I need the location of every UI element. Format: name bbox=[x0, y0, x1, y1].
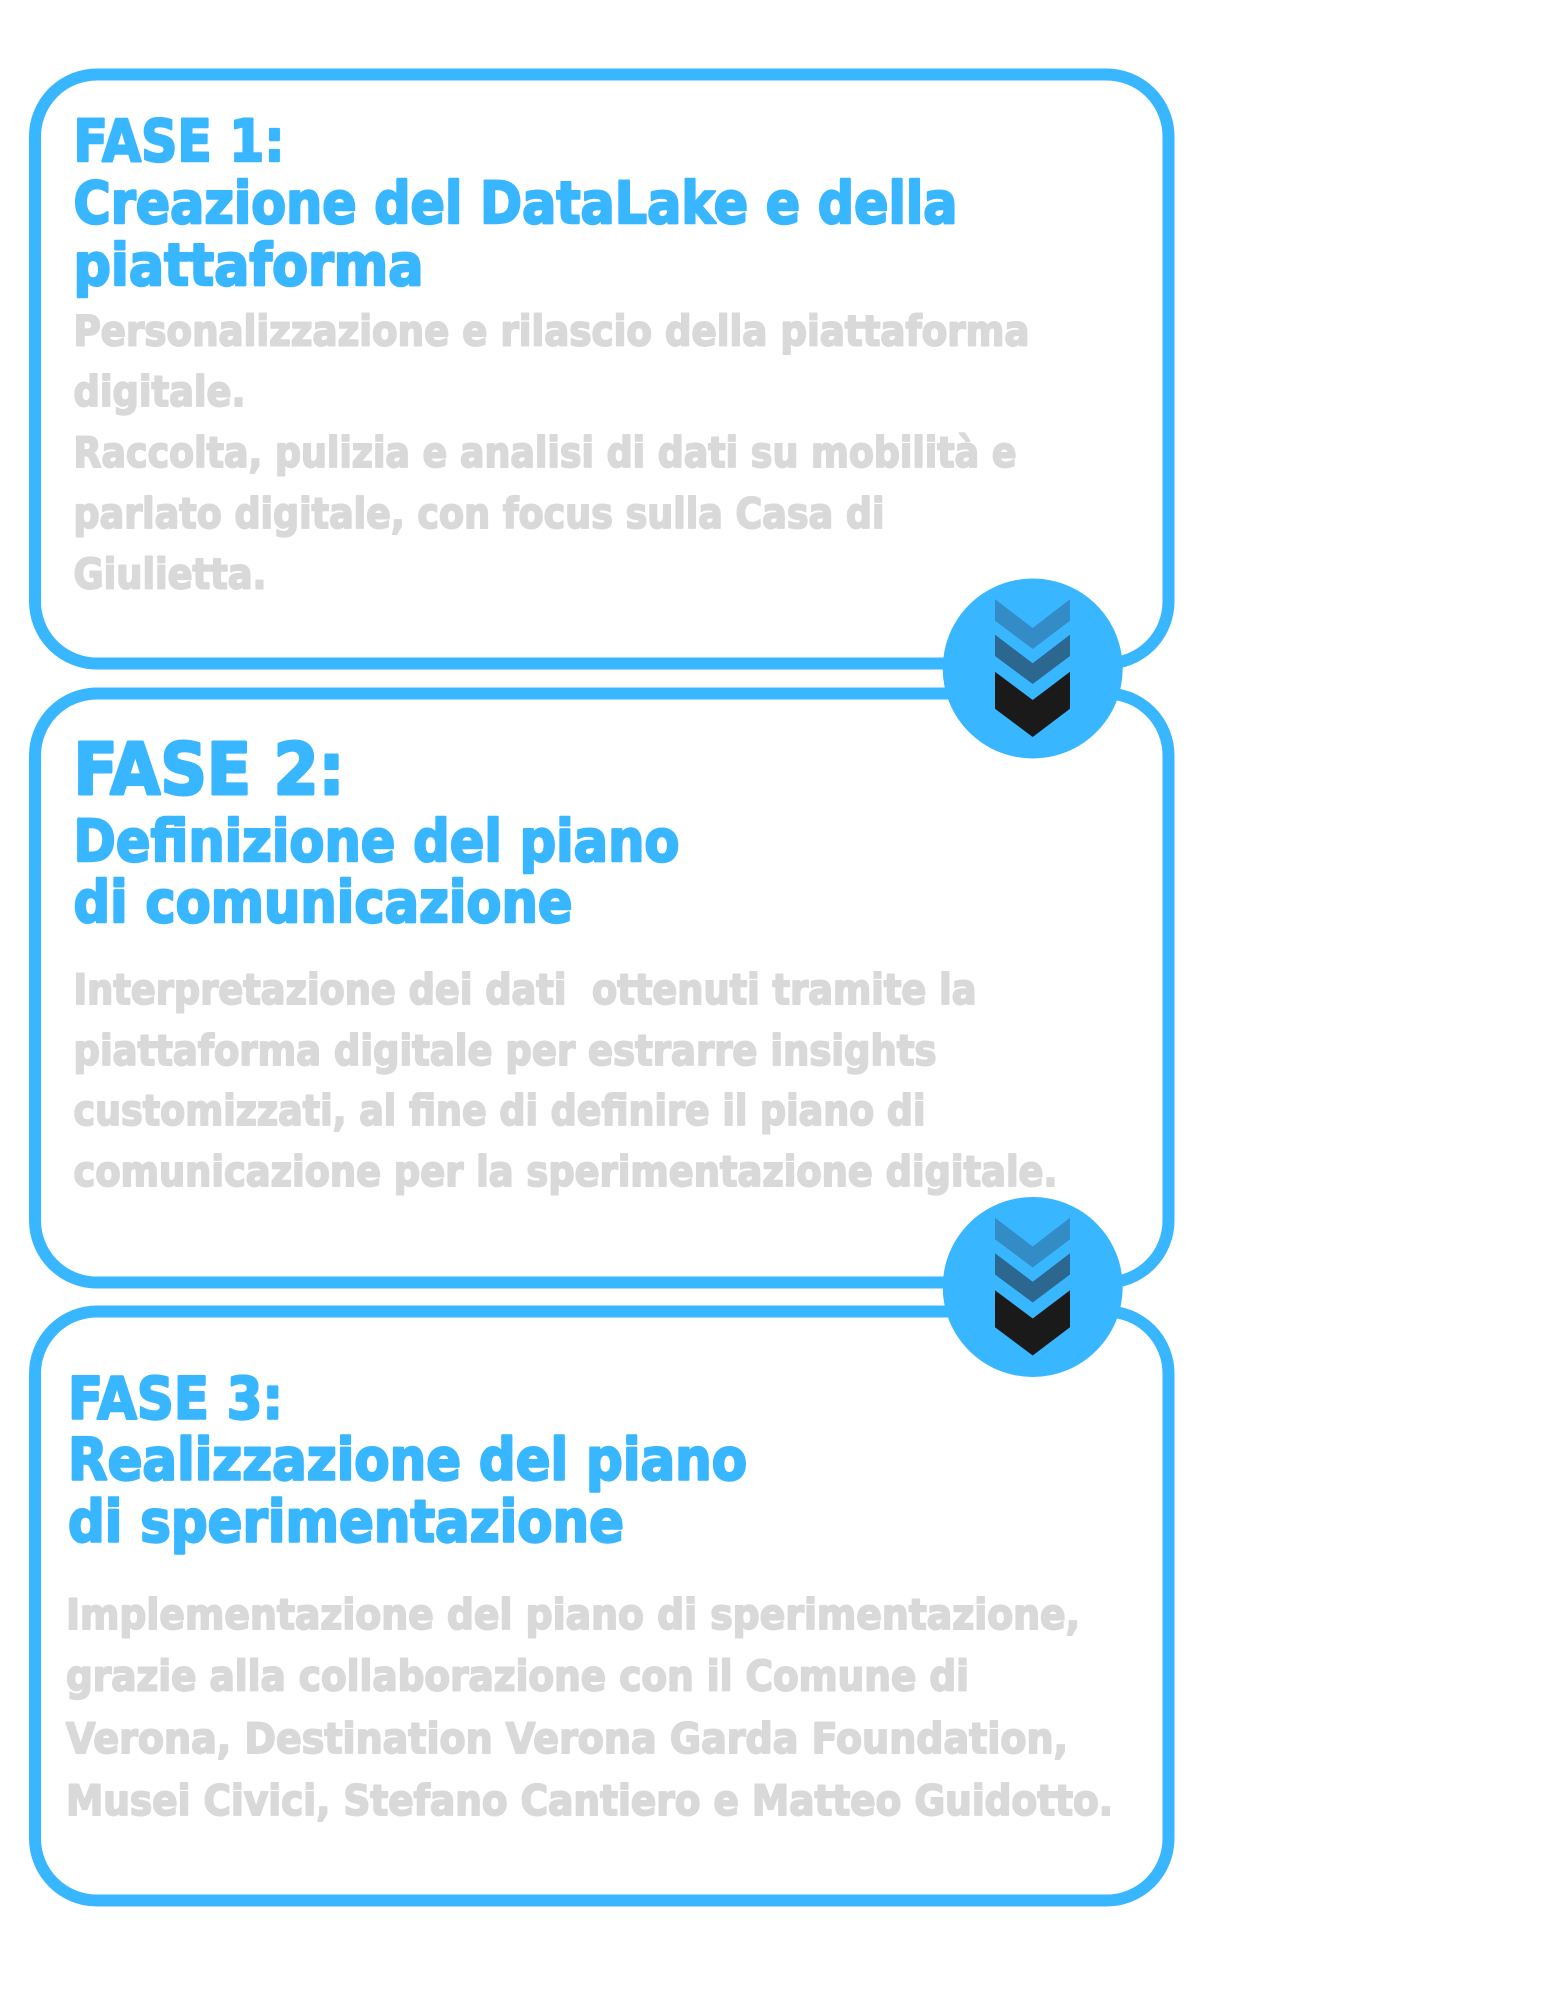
heading: fase 3: FASE 3: bbox=[68, 1366, 283, 1432]
heading: fase 1 bbox=[74, 108, 958, 299]
heading: fase 3: Realizzazione del piano bbox=[68, 1426, 747, 1494]
panel 1 border bbox=[35, 74, 1168, 664]
text block: fase 3 description: Musei Civici, Stefano Cantiero e Matteo Guidotto. bbox=[66, 1776, 1113, 1825]
heading: fase 2: FASE 2: bbox=[74, 728, 344, 811]
text block: fase 3 description: Implementazione del piano di sperimentazione, bbox=[66, 1590, 1080, 1639]
panel: fase 2 bbox=[35, 694, 1168, 1282]
text block: fase 1 description bbox=[74, 306, 1030, 598]
text block: fase 2 description: comunicazione per la sperimentazione digitale. bbox=[74, 1147, 1058, 1196]
icon: chevrons down badge 2 bbox=[943, 1197, 1123, 1377]
text block: fase 1 description: parlato digitale, con focus sulla Casa di bbox=[74, 489, 884, 538]
panel: fase 1 bbox=[35, 74, 1168, 664]
heading: fase 3 bbox=[68, 1366, 747, 1556]
panel 3 border bbox=[35, 1312, 1168, 1900]
heading: fase 1: Creazione del DataLake e della bbox=[74, 170, 958, 237]
text block: fase 1 description: digitale. bbox=[74, 367, 246, 416]
heading: fase 1: piattaforma bbox=[74, 232, 424, 299]
text block: fase 1 description: Raccolta, pulizia e analisi di dati su mobilità e bbox=[74, 428, 1016, 477]
heading: fase 2: di comunicazione bbox=[74, 869, 572, 936]
text block: fase 3 description: Verona, Destination Verona Garda Foundation, bbox=[66, 1714, 1068, 1763]
text block: fase 2 description: piattaforma digitale per estrarre insights bbox=[74, 1026, 936, 1075]
heading: fase 2: Definizione del piano bbox=[74, 808, 680, 875]
panel 2 border bbox=[35, 694, 1168, 1282]
text block: fase 3 description bbox=[66, 1590, 1113, 1825]
heading: fase 1: FASE 1: bbox=[74, 108, 284, 175]
panel: fase 3 bbox=[35, 1312, 1168, 1900]
text block: fase 2 description: customizzati, al fine di definire il piano di bbox=[74, 1086, 926, 1135]
heading: fase 2 bbox=[74, 728, 680, 936]
icon: chevrons down badge 1 bbox=[943, 578, 1123, 758]
text block: fase 1 description: Giulietta. bbox=[74, 550, 266, 598]
text block: fase 2 description bbox=[74, 965, 1058, 1196]
text block: fase 3 description: grazie alla collaborazione con il Comune di bbox=[66, 1652, 969, 1700]
text block: fase 2 description: Interpretazione dei dati ottenuti tramite la bbox=[74, 965, 976, 1014]
heading: fase 3: di sperimentazione bbox=[68, 1488, 624, 1556]
text block: fase 1 description: Personalizzazione e rilascio della piattaforma bbox=[74, 306, 1030, 356]
